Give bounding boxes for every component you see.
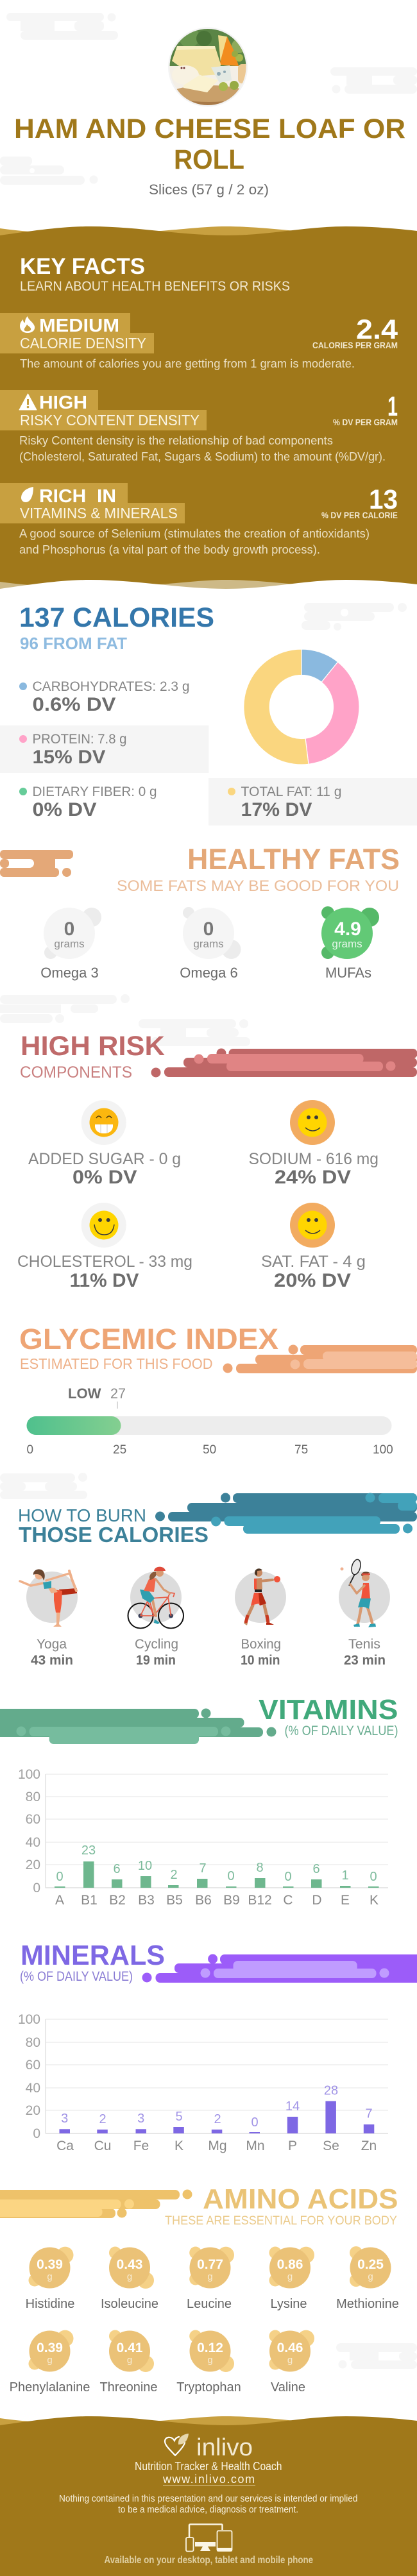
blob: histidine: g (47, 2271, 53, 2282)
blob: MUFAs: grams (332, 938, 362, 950)
icon: smiling emoji (298, 1108, 327, 1137)
legend: dietary fiber: 0% DV (32, 799, 96, 820)
activity: boxing: Boxing (241, 1637, 281, 1652)
blob: valine: Valine (271, 2380, 305, 2394)
bar chart: vitamins: 10 (138, 1859, 152, 1873)
panel: key facts (0, 226, 417, 598)
website link: www.inlivo.com (162, 2473, 255, 2486)
fact: rich in vitamins and minerals: and Phosphorus (a vital part of the body growth process). (19, 543, 320, 556)
bar chart: vitamins: 1 (341, 1868, 349, 1883)
bar chart: vitamins: 40 (26, 1835, 40, 1850)
icon: cycling figure (128, 1567, 183, 1628)
item: saturated fat (261, 1203, 366, 1291)
disclaimer: Nothing contained in this presentation and our services is intended or implied (59, 2493, 358, 2504)
fact: risky content density: Risky Content density is the relationship of bad components (19, 434, 333, 447)
fact: risky content density: HIGH (39, 393, 87, 413)
icon: inlivo heart logo (165, 2434, 189, 2455)
blob: isoleucine: Isoleucine (101, 2297, 158, 2311)
legend: dietary fiber (19, 784, 157, 820)
fact: risky content density (0, 390, 398, 463)
bar chart: minerals: Mg (208, 2139, 227, 2153)
blob: methionine: Methionine (336, 2297, 399, 2311)
bar chart: vitamins: 80 (26, 1790, 40, 1804)
item: sodium: SODIUM - 616 mg (249, 1150, 379, 1168)
gauge scale: 100 (373, 1443, 393, 1457)
blob: omega 3: 0 (64, 919, 74, 940)
subheading: LEARN ABOUT HEALTH BENEFITS OR RISKS (20, 279, 290, 294)
fact: risky content density: % DV PER GRAM (333, 417, 398, 427)
logo wordmark: inlivo (196, 2434, 253, 2461)
bar chart: minerals: Mn (246, 2139, 265, 2153)
blob: phenylalanine (10, 2330, 90, 2394)
blob: omega 3: grams (54, 938, 85, 950)
activity: cycling: Cycling (135, 1637, 178, 1652)
item: cholesterol: 11% DV (70, 1270, 139, 1291)
icon: devices (186, 2525, 232, 2552)
bar chart: minerals: 3 (61, 2112, 68, 2126)
bar chart: vitamins: B9 (223, 1893, 240, 1908)
heading: high risk: HIGH RISK (21, 1031, 165, 1062)
activity: tennis: 23 min (344, 1653, 386, 1668)
activity: yoga: Yoga (37, 1637, 67, 1652)
fact: rich in vitamins and minerals (0, 483, 398, 556)
fact: calorie density: The amount of calories you are getting from 1 gram is moderate. (20, 357, 355, 370)
bar chart: vitamins: 100 (18, 1767, 40, 1782)
fact: risky content density: RISKY CONTENT DENSITY (20, 412, 200, 428)
bar chart: vitamins: E (341, 1893, 350, 1908)
panel: calories (0, 602, 417, 826)
gauge marker (68, 1385, 126, 1409)
legend: total fat (228, 784, 341, 820)
icon: yoga figure (20, 1570, 77, 1627)
bar chart: vitamins: 6 (312, 1862, 320, 1876)
blob: tryptophan: 0.12 (197, 2341, 223, 2355)
activity: yoga (20, 1570, 78, 1668)
blob: omega 3 (40, 908, 101, 981)
title: HAM AND CHEESE LOAF OR (14, 114, 405, 144)
activity: tennis: Tenis (348, 1637, 380, 1652)
legend: carbohydrates: CARBOHYDRATES: 2.3 g (32, 679, 190, 694)
blob: valine: 0.46 (277, 2341, 303, 2355)
blob: threonine: Threonine (99, 2380, 158, 2394)
icon: tennis figure (340, 1559, 376, 1627)
subheading: SOME FATS MAY BE GOOD FOR YOU (117, 877, 399, 895)
fact: risky content density: 1 (387, 391, 398, 422)
bar chart: minerals: 0 (33, 2126, 40, 2141)
blob: histidine: Histidine (26, 2297, 74, 2311)
activity: tennis (339, 1559, 390, 1668)
bar chart: minerals: K (174, 2139, 183, 2153)
legend: dietary fiber: DIETARY FIBER: 0 g (32, 784, 157, 799)
subheading: from fat: 96 FROM FAT (20, 634, 127, 653)
bar chart: vitamins: 23 (81, 1843, 96, 1858)
bar chart: minerals: Ca (56, 2139, 74, 2153)
panel: how to burn those calories (18, 1493, 417, 1668)
activity: boxing (235, 1568, 286, 1668)
gauge marker: LOW (68, 1385, 101, 1402)
fact: rich in vitamins and minerals: % DV PER CALORIE (321, 510, 398, 520)
bar chart: vitamins: 8 (256, 1861, 264, 1875)
blob: histidine (26, 2247, 74, 2311)
blob: MUFAs: MUFAs (325, 965, 371, 981)
bar chart: minerals: 3 (137, 2112, 144, 2126)
panel: vitamins (0, 1694, 398, 1908)
blob: lysine: Lysine (270, 2297, 307, 2311)
blob: methionine (336, 2246, 399, 2311)
blob: threonine: 0.41 (117, 2341, 143, 2355)
legend: carbohydrates: 0.6% DV (32, 694, 115, 715)
blob: methionine: g (368, 2271, 373, 2282)
subheading: components: COMPONENTS (20, 1063, 132, 1081)
blob: isoleucine: g (127, 2271, 132, 2282)
subheading: (% OF DAILY VALUE) (20, 1969, 133, 1984)
item: saturated fat: 20% DV (274, 1270, 351, 1291)
fact: rich in vitamins and minerals: A good source of Selenium (stimulates the creation of antioxidants) (19, 527, 370, 540)
bar chart: minerals (18, 2012, 388, 2153)
heading: glycemic index: GLYCEMIC INDEX (19, 1323, 278, 1355)
bar chart: minerals: 5 (175, 2110, 183, 2124)
disclaimer: to be a medical advice, diagnosis or treatment. (118, 2504, 298, 2515)
bar chart: vitamins: B6 (195, 1893, 212, 1908)
legend: total fat: TOTAL FAT: 11 g (241, 784, 341, 799)
heading: minerals: MINERALS (21, 1940, 165, 1971)
availability note: Available on your desktop, tablet and mobile phone (104, 2555, 313, 2566)
bar chart: vitamins: K (370, 1893, 379, 1908)
blob: MUFAs (321, 906, 379, 981)
blob: omega 6: Omega 6 (180, 965, 238, 981)
subheading: ESTIMATED FOR THIS FOOD (20, 1355, 213, 1372)
bar chart: vitamins: B3 (138, 1893, 155, 1908)
bar chart: minerals: Zn (361, 2139, 377, 2153)
item: saturated fat: SAT. FAT - 4 g (261, 1253, 366, 1271)
bar chart: minerals: 100 (18, 2012, 40, 2027)
bar chart: minerals: 28 (324, 2084, 338, 2098)
blob: leucine: g (207, 2271, 213, 2282)
blob: omega 3: Omega 3 (40, 965, 99, 981)
icon: smiling emoji (298, 1211, 327, 1239)
panel: healthy fats (0, 843, 400, 981)
fact: rich in vitamins and minerals: RICH IN (39, 486, 116, 507)
panel: footer (0, 2416, 417, 2576)
subheading: THESE ARE ESSENTIAL FOR YOUR BODY (165, 2214, 397, 2228)
bar chart: minerals: P (288, 2139, 297, 2153)
bar chart: minerals: Se (323, 2139, 339, 2153)
bar chart: minerals: 80 (26, 2035, 40, 2050)
panel: glycemic index (19, 1323, 417, 1457)
bar chart: vitamins (18, 1767, 388, 1908)
bar chart: minerals: 20 (26, 2103, 40, 2118)
panel: minerals (18, 1940, 417, 2153)
fact: rich in vitamins and minerals: 13 (369, 484, 398, 515)
bar chart: minerals: 40 (26, 2081, 40, 2096)
tagline: Nutrition Tracker & Health Coach (135, 2459, 282, 2473)
item: added sugar: 0% DV (72, 1167, 137, 1188)
legend: total fat: 17% DV (241, 799, 312, 820)
blob: phenylalanine: 0.39 (37, 2341, 63, 2355)
bar chart: vitamins: B1 (81, 1893, 98, 1908)
gauge scale: 75 (294, 1443, 308, 1457)
gauge scale (27, 1443, 393, 1457)
panel: amino acids (0, 2183, 399, 2394)
fact: calorie density (0, 313, 398, 370)
blob: leucine: 0.77 (197, 2257, 223, 2272)
icon: flame (20, 316, 35, 333)
title: ROLL (174, 144, 244, 175)
heading: key facts: KEY FACTS (20, 254, 145, 279)
blob: valine: g (287, 2355, 293, 2366)
blob: omega 6: 0 (203, 919, 214, 940)
blob: phenylalanine: Phenylalanine (10, 2380, 90, 2394)
gauge scale: 0 (27, 1443, 33, 1457)
bar chart: minerals: Cu (94, 2139, 111, 2153)
donut chart (244, 649, 359, 765)
bar chart: vitamins: 6 (113, 1862, 121, 1876)
blob: histidine: 0.39 (37, 2257, 63, 2272)
fact: rich in vitamins and minerals: VITAMINS & MINERALS (20, 505, 178, 521)
bar chart: minerals: 0 (251, 2115, 259, 2130)
subheading: (% OF DAILY VALUE) (285, 1724, 398, 1738)
bar chart: minerals: Fe (133, 2139, 149, 2153)
bar chart: vitamins: D (312, 1893, 322, 1908)
bar chart: vitamins: B12 (248, 1893, 272, 1908)
food photo: cheese board (168, 27, 250, 107)
bar chart: vitamins: B5 (166, 1893, 183, 1908)
blob: methionine: 0.25 (357, 2257, 384, 2272)
activity: yoga: 43 min (31, 1653, 73, 1668)
icon: grinning emoji (90, 1108, 118, 1137)
bar chart: vitamins: A (55, 1893, 64, 1908)
bar chart: vitamins: 7 (199, 1861, 207, 1876)
blob: threonine: g (127, 2355, 132, 2366)
blob: lysine: 0.86 (277, 2257, 303, 2272)
blob: tryptophan (176, 2330, 241, 2394)
heading: those calories: THOSE CALORIES (19, 1523, 208, 1546)
bar chart: minerals: 2 (99, 2112, 106, 2126)
gauge scale: 25 (113, 1443, 126, 1457)
blob: phenylalanine: g (47, 2355, 53, 2366)
item: sodium: 24% DV (275, 1167, 351, 1188)
blob: lysine: g (287, 2271, 293, 2282)
item: added sugar (28, 1100, 181, 1188)
activity: boxing: 10 min (241, 1653, 280, 1668)
bar chart: vitamins: 0 (284, 1870, 292, 1884)
blob: threonine (99, 2330, 158, 2394)
bar chart: vitamins: 2 (170, 1868, 178, 1882)
icon: warning (19, 394, 37, 410)
blob: leucine (187, 2246, 234, 2311)
fact: risky content density: (Cholesterol, Saturated Fat, Sugars & Sodium) to the amount (%DV/gr). (19, 450, 386, 463)
legend: protein: PROTEIN: 7.8 g (32, 731, 127, 747)
blob: isoleucine (101, 2246, 158, 2311)
legend: protein (19, 731, 127, 768)
icon: smiling emoji (90, 1211, 118, 1239)
legend: carbohydrates (19, 679, 190, 715)
legend: protein: 15% DV (32, 747, 105, 768)
title (14, 114, 405, 175)
item: sodium (249, 1100, 379, 1188)
blob: lysine (269, 2246, 314, 2311)
icon: boxing figure (244, 1568, 280, 1625)
bar chart: vitamins: 0 (33, 1881, 40, 1895)
blob: omega 6 (180, 907, 241, 981)
gauge bar (27, 1416, 391, 1435)
blob: isoleucine: 0.43 (117, 2257, 142, 2272)
bar chart: vitamins: 0 (227, 1869, 235, 1883)
item: added sugar: ADDED SUGAR - 0 g (28, 1150, 181, 1168)
blob: tryptophan: g (207, 2355, 213, 2366)
heading: vitamins: VITAMINS (259, 1694, 398, 1725)
fact: calorie density: 2.4 (356, 314, 398, 345)
bar chart: minerals: 7 (365, 2107, 373, 2121)
fact: calorie density: CALORIES PER GRAM (312, 340, 398, 350)
fact: calorie density: CALORIE DENSITY (20, 335, 146, 352)
bar chart: minerals: 14 (285, 2099, 300, 2114)
heading: how to burn: HOW TO BURN (18, 1505, 146, 1525)
bar chart: vitamins: 20 (26, 1858, 40, 1872)
bar chart: minerals: 2 (214, 2112, 221, 2126)
icon: leaf (21, 487, 33, 502)
blob: omega 6: grams (193, 938, 224, 950)
blob: valine (269, 2330, 314, 2394)
blob: leucine: Leucine (187, 2297, 232, 2311)
fact: calorie density: MEDIUM (39, 316, 119, 336)
activity: cycling (128, 1567, 183, 1668)
disclaimer (59, 2493, 358, 2515)
heading: 137 calories: 137 CALORIES (19, 602, 214, 633)
blob: MUFAs: 4.9 (334, 919, 361, 940)
bar chart: minerals: 60 (26, 2058, 40, 2072)
activity: cycling: 19 min (136, 1653, 176, 1668)
item: cholesterol (17, 1203, 192, 1291)
bar chart: vitamins: B2 (109, 1893, 126, 1908)
bar chart: vitamins: 0 (370, 1870, 377, 1884)
bar chart: vitamins: C (283, 1893, 293, 1908)
serving size: Slices (57 g / 2 oz) (149, 182, 269, 198)
gauge scale: 50 (203, 1443, 216, 1457)
panel: high risk components (17, 1031, 417, 1291)
gauge marker: 27 (110, 1385, 126, 1402)
bar chart: vitamins: 0 (56, 1870, 64, 1884)
bar chart: vitamins: 60 (26, 1812, 40, 1827)
item: cholesterol: CHOLESTEROL - 33 mg (17, 1253, 192, 1271)
blob: tryptophan: Tryptophan (176, 2380, 241, 2394)
heading: healthy fats: HEALTHY FATS (187, 843, 400, 876)
heading: amino acids: AMINO ACIDS (203, 2183, 398, 2215)
